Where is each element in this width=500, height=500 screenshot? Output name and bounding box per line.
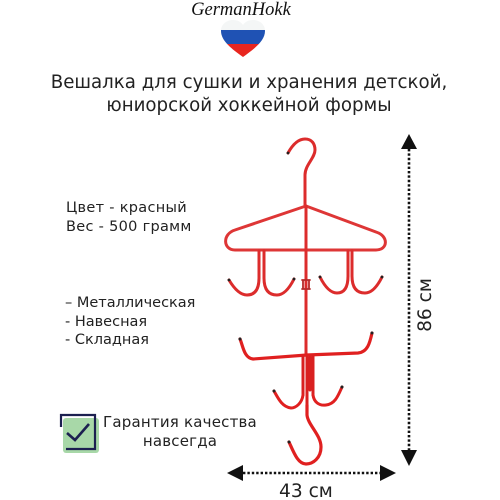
lower side hooks [274,387,342,408]
height label: 86 см [415,278,436,332]
brand name: GermanHokk [191,0,291,20]
upper left hooks [229,251,294,295]
arrow: height [401,134,417,466]
guarantee text: навсегда [143,432,217,450]
bottom hook [289,405,321,464]
features list [65,295,195,348]
lower stems [303,356,313,412]
fold connector [302,280,310,289]
hook caps [228,152,383,444]
icon: Russian flag heart [220,19,266,58]
title [51,72,447,116]
guarantee text [103,413,257,450]
arrow: width [227,465,396,481]
hanger [226,139,385,464]
icon: guarantee checkbox [61,415,99,453]
top hook [288,139,315,206]
features list: - Складная [65,332,149,348]
colour and weight: Вес - 500 грамм [66,218,192,234]
title: Вешалка для сушки и хранения детской, [51,72,447,93]
lower arms [240,333,372,359]
features list: - Навесная [65,314,147,330]
upper right hooks [320,251,382,293]
features list: – Металлическая [65,295,195,311]
shoulder frame [226,206,385,250]
guarantee text: Гарантия качества [103,413,257,431]
title: юниорской хоккейной формы [106,95,392,116]
centre pole [304,206,308,355]
colour and weight [66,200,192,234]
colour and weight: Цвет - красный [66,200,187,216]
